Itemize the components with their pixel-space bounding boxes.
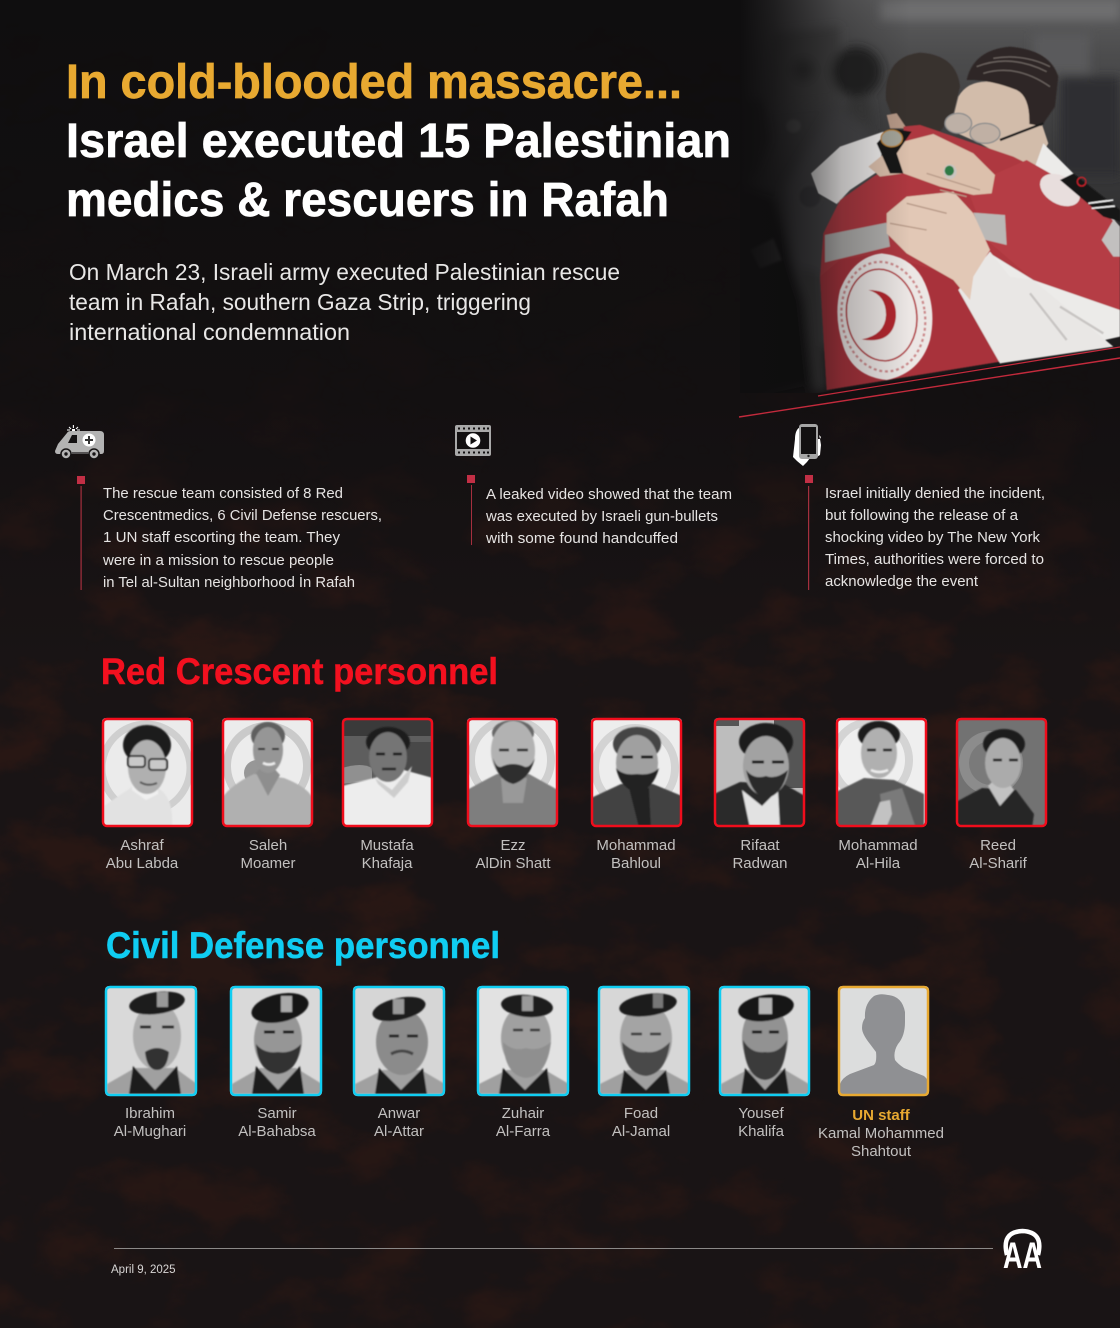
name: Saleh [249, 837, 287, 854]
portrait: Rifaat Radwan [714, 718, 805, 828]
subtitle: On March 23, Israeli army executed Palestinian rescue [69, 259, 620, 285]
title: Israel executed 15 Palestinian [66, 115, 731, 168]
red jacket back [820, 125, 1120, 390]
info block: leaked video: A leaked video showed that the team [486, 487, 732, 503]
info block: rescue team: in Tel al-Sultan neighborhood İn Rafah [103, 573, 355, 591]
info block: rescue team: 1 UN staff escorting the team. They [103, 530, 341, 546]
reflective strips [825, 223, 890, 262]
face of man [950, 82, 1048, 167]
name: Khalifa [738, 1123, 785, 1140]
name: Al-Hila [856, 855, 901, 872]
shoulder badge and strap [1039, 173, 1081, 208]
name [475, 837, 551, 872]
name [360, 837, 414, 872]
name [596, 837, 676, 872]
icon: ambulance [55, 425, 104, 459]
name [738, 1105, 785, 1140]
name: Al-Bahabsa [238, 1123, 316, 1140]
upper hand [868, 134, 995, 195]
portrait: Zuhair Al-Farra [477, 986, 569, 1096]
portrait: Ezz AlDin Shatt [467, 718, 558, 828]
portrait: Yousef Khalifa [719, 986, 810, 1096]
name [240, 837, 296, 872]
name: Samir [257, 1105, 297, 1122]
name: UN staff: Shahtout [851, 1143, 912, 1160]
name: Al-Jamal [612, 1123, 670, 1140]
logo: AA [1003, 1231, 1042, 1276]
info block: rescue team: were in a mission to rescue people [102, 553, 334, 569]
name: Ibrahim [125, 1105, 175, 1122]
subtitle [69, 259, 620, 345]
title: medics & rescuers in Rafah [66, 174, 669, 227]
hero photo: medics embracing [740, 0, 1120, 400]
red crescent emblem [834, 253, 932, 380]
portrait: Mohammad Bahloul [591, 718, 682, 828]
portrait: Ibrahim Al-Mughari [105, 986, 197, 1096]
name [612, 1105, 670, 1140]
name [374, 1105, 424, 1140]
white shirt at neck and shoulder [957, 143, 1120, 363]
name: UN staff [818, 1107, 944, 1160]
name: Bahloul [611, 855, 661, 872]
name: Ashraf [120, 837, 165, 854]
portrait: Foad Al-Jamal [598, 986, 690, 1096]
name: Mustafa [360, 837, 414, 854]
portrait: Mohammad Al-Hila [833, 718, 927, 828]
subtitle: international condemnation [69, 319, 350, 345]
info block: leaked video: with some found handcuffed [485, 531, 678, 547]
portrait: Samir Al-Bahabsa [230, 986, 322, 1096]
portrait: Ashraf Abu Labda [102, 718, 193, 826]
title [66, 56, 731, 227]
portrait: Reed Al-Sharif [956, 718, 1047, 828]
lower hand [887, 192, 990, 300]
name: Al-Mughari [114, 1123, 186, 1140]
subtitle: team in Rafah, southern Gaza Strip, triggering [69, 289, 531, 315]
name: Ezz [500, 837, 526, 854]
logo: AA: AA [1003, 1235, 1042, 1276]
date: April 9, 2025 [111, 1264, 176, 1276]
name: Mohammad [838, 837, 918, 854]
info block: rescue team: Crescentmedics, 6 Civil Defense rescuers, [103, 508, 382, 524]
decorative red lines under photo [739, 347, 1120, 417]
name: Foad [624, 1105, 658, 1122]
name [969, 837, 1028, 872]
name [238, 1105, 316, 1140]
icon: phone in hand [793, 424, 821, 466]
name: Mohammad [596, 837, 676, 854]
portrait: UN staff silhouette [838, 986, 929, 1096]
portrait: Mustafa Khafaja [342, 718, 433, 828]
icon: video film [455, 425, 491, 456]
portrait: Anwar Al-Attar [353, 986, 445, 1096]
heading: Red Crescent personnel: Red Crescent personnel [101, 651, 498, 692]
name [732, 837, 788, 872]
name: Moamer [240, 855, 296, 872]
white sleeve upper left [811, 132, 883, 204]
name: Anwar [378, 1105, 420, 1122]
name: Reed [980, 837, 1016, 854]
name: Zuhair [502, 1105, 544, 1122]
portrait: Saleh Moamer [222, 718, 313, 828]
info block: rescue team: The rescue team consisted of 8 Red [103, 486, 343, 502]
info block: leaked video [467, 475, 732, 547]
name [114, 1105, 186, 1140]
title: In cold-blooded massacre... [66, 56, 682, 109]
name: Al-Sharif [969, 855, 1028, 872]
info block: denial: Times, authorities were forced to [825, 552, 1044, 568]
white cuff [958, 252, 1113, 363]
watch [877, 128, 912, 173]
name: Radwan [732, 855, 788, 872]
name [496, 1105, 551, 1140]
name [838, 837, 918, 872]
ring [943, 164, 957, 179]
name: UN staff: UN staff [852, 1107, 911, 1124]
name: Al-Farra [496, 1123, 551, 1140]
info block: denial [805, 475, 1045, 590]
info block: denial: but following the release of a [825, 508, 1019, 524]
name [106, 837, 179, 872]
info block: denial: shocking video by The New York [825, 530, 1041, 546]
name: Al-Attar [374, 1123, 424, 1140]
info block: leaked video: was executed by Israeli gun-bullets [485, 509, 718, 525]
name: Abu Labda [106, 855, 179, 872]
footer rule [114, 1248, 993, 1250]
name: AlDin Shatt [475, 855, 551, 872]
name: Yousef [738, 1105, 784, 1122]
info block: rescue team [77, 476, 382, 591]
info block: denial: acknowledge the event [825, 574, 978, 590]
back of head [886, 53, 960, 132]
name: Rifaat [740, 837, 780, 854]
name: Khafaja [362, 855, 413, 872]
heading: Civil Defense personnel: Civil Defense personnel [106, 925, 500, 966]
info block: denial: Israel initially denied the incident, [825, 486, 1045, 502]
name: UN staff: Kamal Mohammed [818, 1125, 944, 1142]
